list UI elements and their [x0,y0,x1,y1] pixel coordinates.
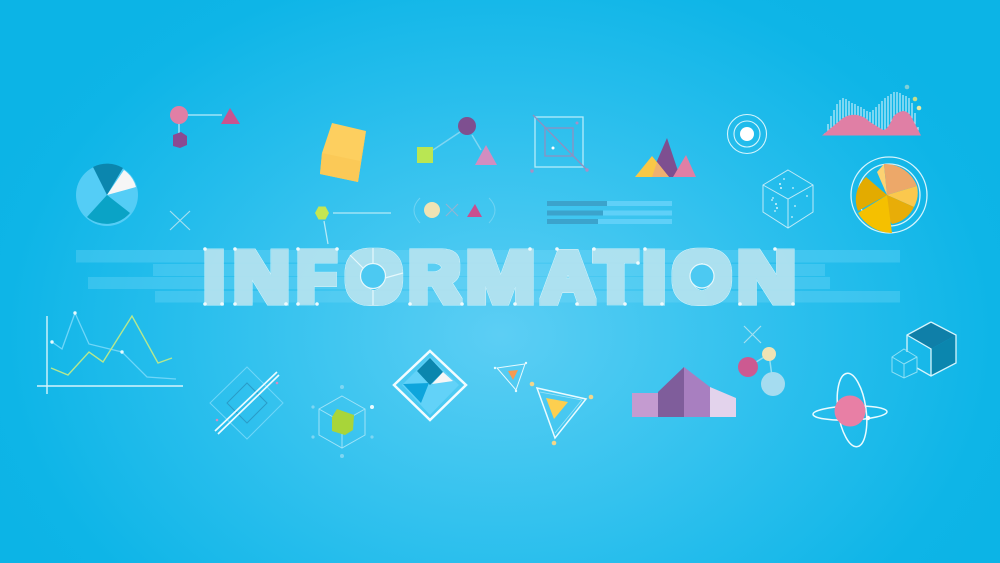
icon: hexagon green cube [311,385,374,458]
icon: node graph shapes [417,117,497,165]
icon: orbit sphere [813,371,887,449]
title: INFORMATION: F [297,238,336,318]
title: INFORMATION: T [595,237,636,318]
icon: pie chart [76,164,138,226]
icon: node graph pink [170,106,240,148]
title: INFORMATION: R [409,238,460,318]
icon: green hexagon connector [315,206,391,244]
icon: text lines [547,201,672,224]
title: INFORMATION: I [641,237,667,318]
icon: line chart [37,311,183,394]
icon: bracketed shapes [414,198,495,223]
icon: purple house shape [632,367,736,417]
title: INFORMATION: O [672,237,731,318]
title: INFORMATION: O [346,237,402,318]
icon: big triangle [530,382,593,445]
background stripes [76,250,900,302]
title: INFORMATION: I [203,237,225,317]
icon: square frames [530,115,589,173]
icon: small triangle [494,362,527,392]
icon: yellow cube [320,123,366,182]
icon: cross left [170,211,190,230]
icon: mountain area chart [822,85,921,136]
icon: framed diamond [394,351,466,420]
icon: cross and circles [738,326,785,396]
title anchor dots [203,247,795,306]
title: INFORMATION: M [466,236,535,318]
title: INFORMATION: N [233,237,290,317]
title: INFORMATION: A [542,238,595,318]
icon: triangle mountains [635,138,696,177]
segmented O lines [350,248,714,305]
icon: concentric target [728,114,766,154]
icon: radial yellow chart [851,157,927,233]
icon: wireframe dice cube [763,170,813,228]
title: INFORMATION [203,236,796,318]
icon: blue cubes [892,322,956,378]
title: INFORMATION: N [737,238,796,318]
icon: diamond with double lines [210,367,283,439]
